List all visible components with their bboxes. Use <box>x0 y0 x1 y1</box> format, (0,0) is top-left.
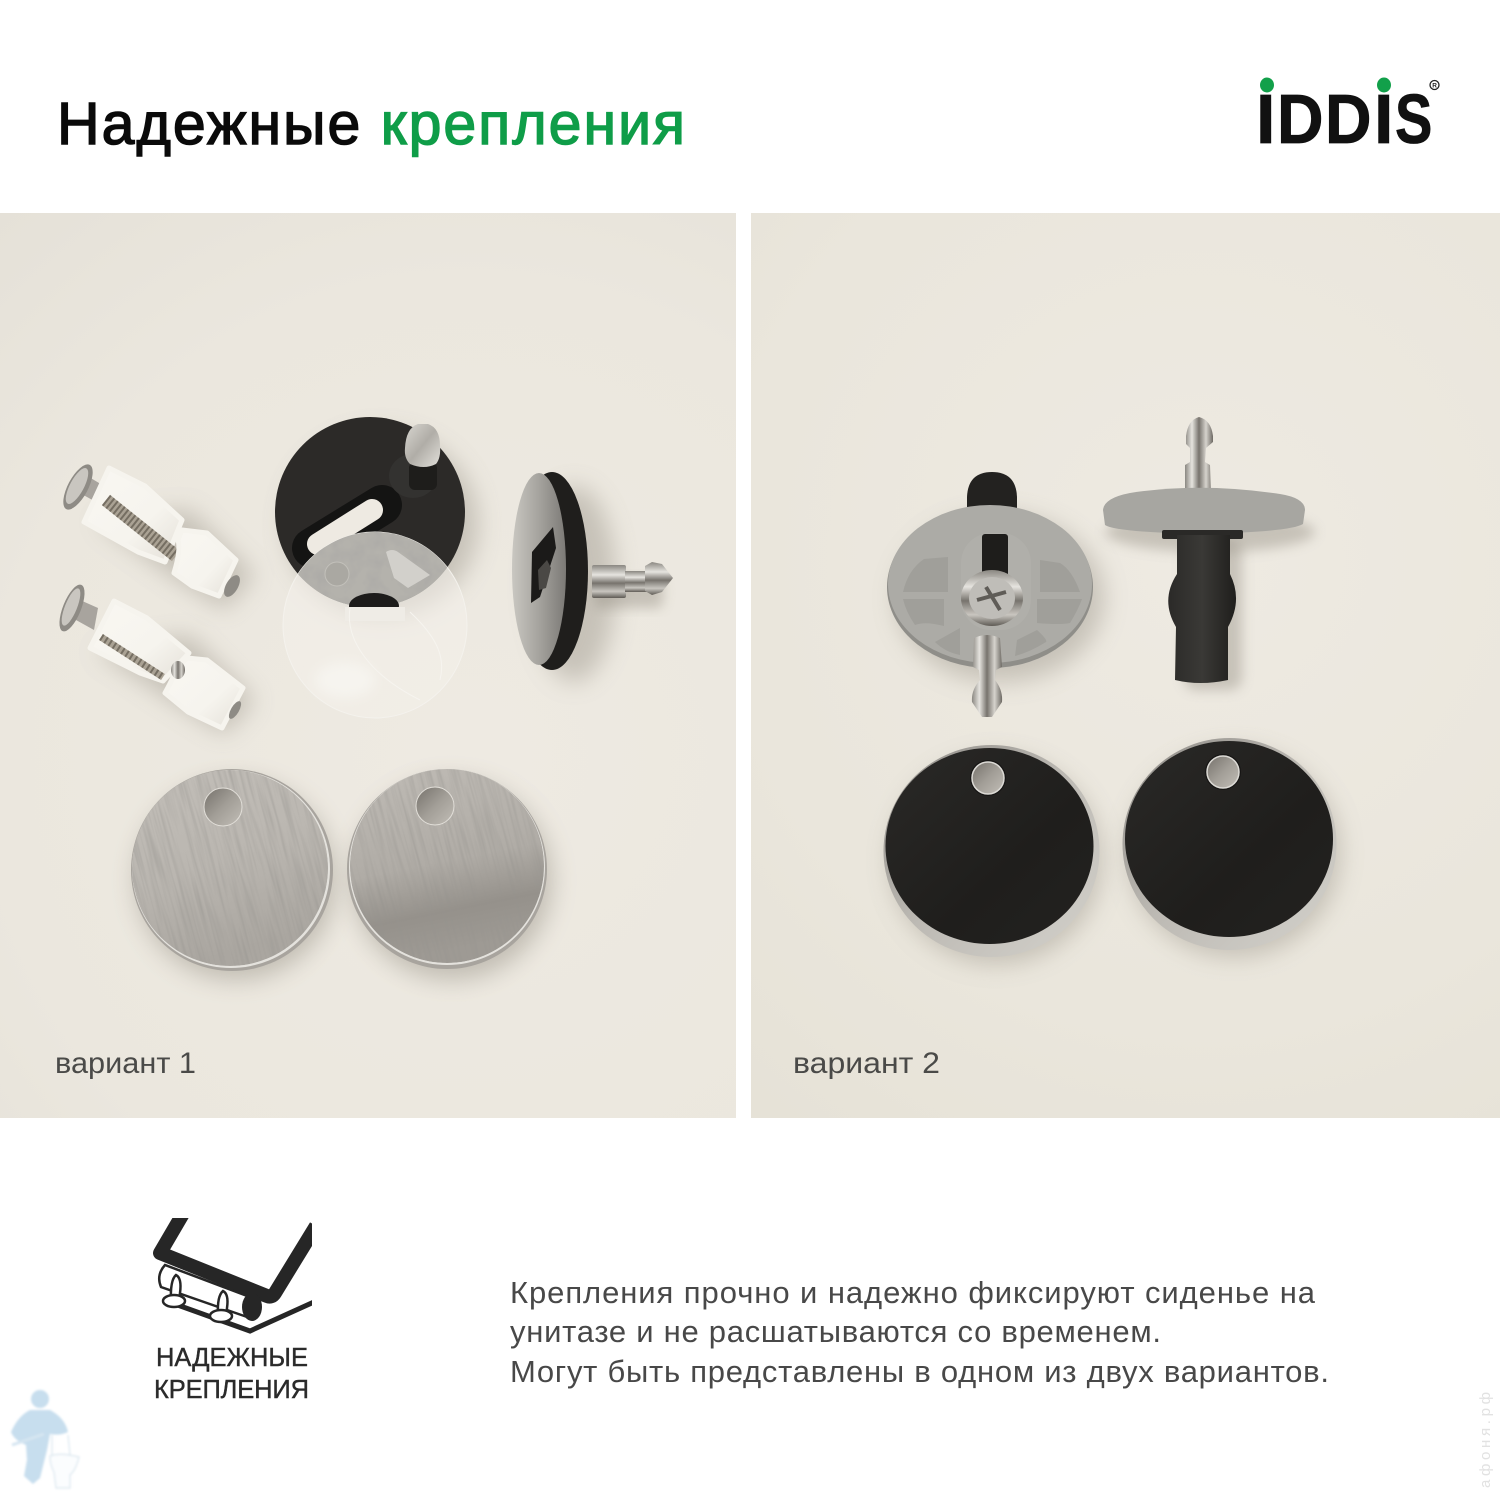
description text: Могут быть представлены в одном из двух вариантов. <box>510 1354 1329 1389</box>
title: Надежные крепления <box>57 91 685 157</box>
transparent sticker <box>283 532 468 718</box>
recessed quadrants <box>903 557 1082 656</box>
black mounting disc with pin <box>275 417 478 718</box>
label: variant 1: вариант 1 <box>55 1047 196 1080</box>
screw plug 2 <box>54 581 255 735</box>
icon: hinge on toilet seat <box>159 1212 316 1331</box>
label: variant 2: вариант 2 <box>793 1047 940 1080</box>
brushed steel cover 2 <box>342 769 562 990</box>
logo: IDDIS <box>1256 78 1439 159</box>
screw plug 1 <box>57 460 255 610</box>
watermark: site name: афоня.рф <box>1477 1392 1494 1488</box>
pin <box>972 635 1002 717</box>
logo: IDDIS: D <box>1325 81 1372 159</box>
description text: Крепления прочно и надежно фиксируют сиденье на <box>510 1275 1316 1310</box>
black cover 1 <box>884 745 1102 964</box>
grey adapter side view <box>1103 417 1315 690</box>
icon caption <box>154 1344 309 1404</box>
watermark: plumber with toilet <box>11 1390 79 1488</box>
logo: IDDIS: D <box>1277 81 1324 159</box>
panel: variant 2 <box>751 213 1500 1118</box>
description text: унитазе и не расшатываются со временем. <box>510 1314 1161 1349</box>
grey adapter front view <box>887 472 1104 717</box>
logo: IDDIS: I <box>1374 80 1393 158</box>
icon caption: КРЕПЛЕНИЯ <box>154 1376 309 1404</box>
logo: IDDIS: I <box>1256 80 1275 158</box>
logo: IDDIS: S <box>1395 81 1432 158</box>
icon caption: НАДЕЖНЫЕ <box>156 1344 308 1372</box>
slot and washer <box>961 533 1031 630</box>
side-view disc with bolt <box>512 472 673 682</box>
black cover 2 <box>1122 738 1340 957</box>
description text <box>510 1275 1329 1389</box>
brushed steel cover 1 <box>126 769 346 990</box>
logo: IDDIS: R <box>1432 82 1437 90</box>
panel: variant 1 <box>0 213 736 1118</box>
